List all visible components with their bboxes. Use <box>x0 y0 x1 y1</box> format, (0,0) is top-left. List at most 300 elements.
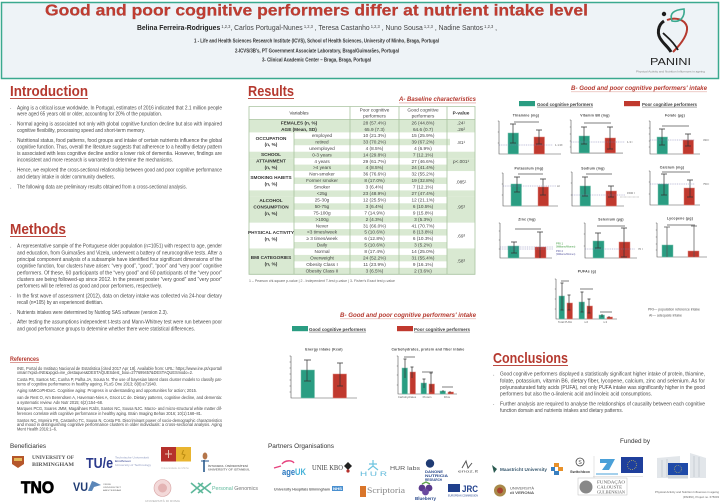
chart note: PRI and AI: PRI— population reference intake <box>648 308 700 312</box>
row labels: (n, %) <box>265 236 278 242</box>
chart: carbohydrates, protein and fiber: Fibre <box>444 395 451 399</box>
good performers column: 7 (12.1%) <box>413 152 434 157</box>
logo: JRC <box>448 484 478 498</box>
authors: , <box>493 23 497 32</box>
logo: JRC: EUROPEAN COMMISSION <box>448 494 478 498</box>
text block: reference list: INE. Portal do Instituto Nacional de Estatística [cited 2017 Apr 18]. Available from: URL: https://www.ine.pt/xportal/ <box>17 366 223 371</box>
logo: VU: AMSTERDAM <box>103 489 121 492</box>
authors: , Teresa Castanho <box>313 23 370 32</box>
row labels: (n, %) <box>265 262 278 266</box>
text block: methods bullets: A representative sample of the Portuguese older population (n=1051) with respect to age, gender <box>17 244 222 250</box>
poor performers column: 4 (8.5%) <box>366 165 384 170</box>
logo: Istanbul University: İSTANBUL ÜNİVERSİTESİ <box>208 463 248 468</box>
p-value column: .085¹ <box>456 180 467 184</box>
text block: methods bullets: performers. Of these, 60 participants of the “very good” and 60 participants of the “very poor” <box>17 270 222 276</box>
poor performers column: 3 (6.4%) <box>366 204 384 209</box>
table grid <box>249 106 475 274</box>
logo: FP7 <box>593 456 643 478</box>
chart: sodium <box>571 166 639 206</box>
text block: introduction bullets: Nutritional status, food patterns, food groups and intake of certain nutrients influence the global <box>17 138 222 144</box>
authors: 1,2,3 <box>423 24 433 29</box>
good performers column: 32 (55.2%) <box>412 172 435 177</box>
logo: Fundação Calouste Gulbenkian: FUNDAÇÃO <box>597 480 626 484</box>
logo: TU/e: Technische Universiteit <box>115 456 149 460</box>
chart: zinc: (Williams/Women) <box>556 253 576 256</box>
text block: reference list: ferences correlate with cognitive performance in healthy aging. Brain Imaging Behav 2016; 10(1):168–81. <box>17 411 202 416</box>
text block: conclusions bullets <box>493 372 705 414</box>
poor performers column: 2 (4.3%) <box>366 217 384 222</box>
text block: reference list: van de Rest O, Am Berendsen A, Haveman-Nies A, Groot LC de. Dietary patterns, cognitive decline, and dementia: <box>17 395 222 400</box>
good performers column: 6 (10.3%) <box>413 236 434 241</box>
chart: zinc: PRI 1 <box>556 242 563 246</box>
text block: methods bullets: recall (n=105) by an experienced dietitian. <box>17 300 103 306</box>
logo: University of Verona <box>494 484 534 496</box>
logo: HUR: HUR labs <box>390 466 421 472</box>
authors: , Nuno Sousa <box>380 23 424 32</box>
PANINI logo: Physical Activity and Nutrition Influences in ageing <box>636 70 705 74</box>
text block: reference list: terns of cognitive performance in healthy ageing. PLoS One 2013; 8(8):e71940. <box>17 382 157 386</box>
label: beneficiaries: Beneficiaries <box>10 443 47 450</box>
affiliations: 2-ICVS/3B's, PT Government Associate Laboratory, Braga/Guimarães, Portugal <box>235 48 400 54</box>
chart: thiamine <box>498 114 563 154</box>
panel: conclusions <box>493 350 705 414</box>
category column: Overweight <box>310 256 335 260</box>
good performers column: 24 (41.4%) <box>412 165 435 170</box>
table header: performers <box>412 114 435 118</box>
p-value column: .81¹ <box>457 140 465 145</box>
logo: Fundação Calouste Gulbenkian: CALOUSTE <box>597 484 622 490</box>
poor performers column: 5 (10.6%) <box>364 230 385 235</box>
panel: intake charts lower <box>290 313 477 399</box>
logo: VU: UNIVERSITEIT <box>103 487 122 489</box>
good performers column: 6 (10.5%) <box>413 204 434 209</box>
logo: Blueberry <box>415 482 436 501</box>
logo: University of Minho: Universidade do Minho <box>161 466 189 470</box>
chart: zinc: PRI 2 <box>556 249 563 253</box>
row labels: ALCOHOL <box>259 198 283 203</box>
logo: University Hospitals Birmingham: University Hospitals Birmingham <box>274 488 330 492</box>
logo: TU/e <box>86 455 152 472</box>
poor performers column: 5 (10.6%) <box>364 243 385 248</box>
legend: lower: Poor cognitive performers <box>414 327 470 333</box>
panel: funders <box>570 438 719 499</box>
logo: VU: VU <box>73 480 88 494</box>
logo: TU/e: University of Technology <box>115 463 152 467</box>
chart: lycopene <box>656 216 707 257</box>
good performers column: 27 (46.6%) <box>412 159 435 164</box>
text block: conclusions bullets: function domain and nutrients intakes and dietary patterns. <box>500 408 623 414</box>
row labels: CONSUMPTION <box>253 204 289 210</box>
text block: methods bullets: clusters are being followed-up since 2012. In the present poster “very good” and “very poor” <box>17 277 222 283</box>
chart: potassium: AI <box>557 184 560 188</box>
poor performers column: 65.9 (7.3) <box>364 127 385 132</box>
chart: carbohydrates, protein and fiber: Carbohydrates <box>398 395 417 399</box>
logo: University of Birmingham <box>12 455 75 468</box>
table footnote: 1 – Pearson chi-square p-value | 2 - Independent T-test p-value | 3- Fisher's Exact test p-value <box>249 279 395 283</box>
poor performers column: 3 (6.4%) <box>366 185 384 190</box>
category column: 25-30g <box>315 198 330 202</box>
chart: thiamine: 1.1 RI <box>555 143 563 147</box>
p-value column: .26² <box>457 127 465 132</box>
text block: reference list: and mood in distinguishing cognitive performance clusters in older individuals: a cross-sectional analysis. Aging <box>17 422 223 427</box>
chart: zinc <box>499 218 576 258</box>
good performers column: 26 (44.8%) <box>412 120 435 125</box>
logo: Danone Nutricia Research: DANONE <box>425 469 443 474</box>
text block: methods bullets: . <box>10 244 12 250</box>
logo: Switchbox: S <box>578 460 582 466</box>
chart: pufas: Total PUFA <box>558 320 572 324</box>
row labels <box>248 120 318 267</box>
logo: Sapienza seal <box>145 480 180 503</box>
text block: methods bullets: Nutrients intakes were determined by Nutrilog SAS software (version 2.3). <box>17 310 168 316</box>
logo: University of Verona: UNIVERSITÀ <box>510 486 534 490</box>
PANINI logo: PANINI <box>650 57 691 68</box>
text block: introduction bullets: . <box>10 138 12 144</box>
affiliations: 1 - Life and Health Sciences Research Institute (ICVS), School of Health Sciences, University of Minho, Braga, Portugal <box>194 38 440 44</box>
poor performers column: 36 (76.6%) <box>363 172 386 177</box>
good performers column: 15 (25.9%) <box>412 133 435 138</box>
logo: Danone Nutricia Research <box>425 459 448 482</box>
p-value column: .24¹ <box>457 120 465 125</box>
row labels: BMI CATEGORIES <box>251 255 291 260</box>
good performers column: 12 (21.1%) <box>412 198 435 202</box>
poor performers column: 11 (23.9%) <box>363 262 386 267</box>
heading: results: Results <box>248 83 294 100</box>
table header: Good cognitive <box>407 108 439 112</box>
good performers column: 2 (3.6%) <box>414 268 432 273</box>
poor performers column: 4 (8.5%) <box>366 146 384 151</box>
category column <box>306 133 338 273</box>
chart: sodium: Sodium (mg) <box>581 166 605 170</box>
row labels: PHYSICAL ACTIVITY <box>248 230 295 235</box>
p-value column: .58³ <box>457 258 465 264</box>
affiliations: 3- Clinical Academic Center – Braga, Braga, Portugal <box>262 58 372 64</box>
label: partners organisations: Partners Organisations <box>268 443 335 450</box>
poor performers column: 10 (21.3%) <box>363 133 386 138</box>
legend: lower <box>292 326 470 333</box>
authors: , Nadine Santos <box>433 23 483 32</box>
category column: Never <box>316 223 329 228</box>
p-value column: p<.001¹ <box>453 159 469 164</box>
logo: Istanbul University <box>201 452 250 472</box>
text block: conclusions bullets: performers but also the α-linolenic acid and linoleic acid consumptions. <box>500 392 652 398</box>
logo: Maastricht University <box>492 465 548 473</box>
logo: Sapienza seal: UNIVERSITÀ DI ROMA <box>145 499 180 503</box>
text block: introduction bullets: . <box>10 168 12 174</box>
good performers column: 27 (47.4%) <box>412 191 435 196</box>
p-value column <box>453 120 469 264</box>
heading: methods: Methods <box>10 221 66 238</box>
category column: employed <box>312 133 333 138</box>
good performers column <box>412 120 435 273</box>
logo: Switchbox: Switchbox <box>570 469 591 474</box>
logo: Switchbox <box>570 458 591 474</box>
subheading: intake lower: B- Good and poor cognitive performers' intake <box>340 313 477 319</box>
text block: reference list: Santos NC, Moreira PS, Castanho TC, Sousa N, Costa PS. Discriminant power of socio-demographic characteristics <box>17 418 222 423</box>
chart: folate: 330 I <box>703 138 709 142</box>
row labels: (n, %) <box>265 142 278 147</box>
logo: University of Birmingham: BIRMINGHAM <box>32 462 75 468</box>
category column: Non-smoker <box>309 172 335 177</box>
logo: European Commission <box>655 453 719 499</box>
text block: reference list: xmain?xpid=INE&xpgid=ine_destaques&DESTAQUESdest_boui=277699457&DESTAQUESmodo=2. <box>17 370 193 375</box>
text block: reference list: Aging IoMICoPHDoC. Cognitive aging: Progress in understanding and opportunities for action; 2015. <box>17 388 197 393</box>
row labels: (n, %) <box>265 211 278 216</box>
table header: P-value <box>453 110 470 116</box>
good performers column: 41 (70.7%) <box>412 223 435 228</box>
logo: EU flag small <box>621 457 643 473</box>
chart: pufas: PUFAs (g) <box>578 270 596 274</box>
good performers column: 3 (5.2%) <box>414 243 432 248</box>
heading: references: References <box>10 356 39 363</box>
chart: lycopene: Lycopene (µg) <box>667 216 693 220</box>
category column: 0-3 years <box>312 152 332 157</box>
logo: University Hospitals Birmingham: NHS <box>333 486 342 491</box>
category column: >100g <box>315 217 329 222</box>
logo: Fundação Calouste Gulbenkian: GULBENKIAN <box>597 490 626 494</box>
chart note: PRI and AI: AI— adequate intake <box>649 314 682 318</box>
chart: folate <box>649 114 709 154</box>
panel: intake charts upper <box>498 86 709 324</box>
text block: introduction bullets: Hence, we explored the cross-sectional relationship between good and poor cognitive performance <box>17 168 222 174</box>
category column: Obesity Class I <box>306 262 338 267</box>
good performers column: 39 (67.2%) <box>412 139 435 144</box>
text block: reference list <box>17 366 223 432</box>
logo: VU <box>73 480 122 494</box>
logo: VU: VRIJE <box>103 484 112 486</box>
category column: unemployed <box>309 146 335 151</box>
logo: Personal Genomics <box>191 483 258 493</box>
logo: Unie KBO <box>312 462 352 473</box>
logo: University Hospitals Birmingham <box>274 486 343 492</box>
authors: , Carlos Portugal-Nunes <box>230 23 303 32</box>
poor performers column: 28 (57.4%) <box>363 120 386 125</box>
logo: European Commission: Physical Activity and Nutrition Influences in ageing <box>655 490 719 494</box>
p-value column: .69³ <box>457 234 465 238</box>
text block: introduction bullets: Aging is a critical issue worldwide. In Portugal, estimates of 2016 indicated that 2.1 million people <box>17 105 222 111</box>
PANINI logo <box>636 9 705 74</box>
category column: Daily <box>317 243 328 248</box>
text block: introduction bullets: Normal ageing is associated not only with global cognitive function decline but also with impaired <box>17 121 222 127</box>
category column: Former smoker <box>306 178 338 183</box>
logo: partner cross <box>551 463 563 475</box>
chart: vitamin b6: Vitamin B6 (mg) <box>580 114 610 118</box>
poor performers column: 8 (17.4%) <box>364 249 385 254</box>
text block: methods bullets: After testing the assumptions independent t-tests and Mann-Whitney test were run between poor <box>17 320 222 326</box>
text block: methods bullets: and good performance groups to determine whether there were statistical differences. <box>17 326 195 332</box>
panel: results table <box>248 83 477 283</box>
good performers column: 7 (12.1%) <box>413 185 434 190</box>
good performers column: 31 (55.4%) <box>412 256 435 260</box>
subheading: intake upper: B- Good and poor cognitive performers' intake <box>571 86 708 92</box>
text block: conclusions bullets: . <box>493 372 495 378</box>
chart: zinc: (Williams/Women) <box>556 246 576 248</box>
logo: Unie KBO: UNIE KBO <box>312 464 343 472</box>
text block: methods bullets: . <box>10 293 12 299</box>
legend: upper: Poor cognitive performers <box>642 102 697 108</box>
panel: introduction <box>10 83 222 191</box>
poor performers column: 31 (66.0%) <box>363 223 386 228</box>
authors: Belina Ferreira-Rodrigues <box>137 23 220 32</box>
good performers column: 9 (15.8%) <box>413 210 434 215</box>
row labels: SCHOOL <box>261 152 281 157</box>
category column: retired <box>315 139 329 144</box>
chart: pufas: n-6 <box>584 320 588 324</box>
category column: <25g <box>317 191 328 196</box>
logo: Danone Nutricia Research: NUTRICIA <box>425 473 448 478</box>
chart: selenium <box>584 218 643 258</box>
row labels: (n, %) <box>265 182 278 186</box>
authors: 1,2,3 <box>220 24 231 29</box>
good performers column: 8 (13.8%) <box>413 230 434 235</box>
chart: calcium <box>649 166 709 205</box>
text block: introduction bullets: . <box>10 105 12 111</box>
logo: age UK: ageUK <box>282 467 306 477</box>
chart: vitamin b6: 1.3 I <box>627 140 633 144</box>
text block: reference list: a systematic review. Adv Nutr 2015; 6(2):154–68. <box>17 400 103 405</box>
heading: introduction: Introduction <box>10 83 88 100</box>
logo: Scriptoria <box>360 486 406 497</box>
text block: introduction bullets: . <box>10 121 12 127</box>
category column: 50-75g <box>315 204 330 209</box>
logo: partner mark <box>458 461 479 474</box>
table header: performers <box>363 114 386 118</box>
chart: pufas: n-3 <box>603 320 607 324</box>
logo: Fundação Calouste Gulbenkian <box>578 478 627 495</box>
row labels: (n, %) <box>265 165 278 170</box>
logo: TU/e: TU/e <box>86 455 113 472</box>
good performers column: 14 (25.0%) <box>412 249 435 254</box>
category column: ≥ 3 times/week <box>306 236 338 241</box>
good performers column: 19 (32.8%) <box>412 178 435 183</box>
logo: University of Verona: di VERONA <box>510 490 534 495</box>
good performers column: 64.6 (0.7) <box>413 127 433 132</box>
p-value column: .95³ <box>457 204 465 210</box>
text block: introduction bullets: cognitive flexibility, processing speed and short-term memory. <box>17 128 145 134</box>
chart: folate: Folate (µg) <box>665 114 685 118</box>
chart: pufas <box>555 270 617 324</box>
text block: methods bullets: principal component analysis of a subsample have identified four significant dimensions of the <box>17 257 222 263</box>
text block: introduction bullets: were aged 65 years old or older, accounting for 20% of the population. <box>16 111 162 117</box>
logo: HUR: H U R <box>360 471 387 478</box>
poor performers column: 29 (61.7%) <box>363 159 386 164</box>
category column: >4 years <box>313 165 332 170</box>
poor performers column: 8 (17.0%) <box>364 178 385 183</box>
text block: introduction bullets: and dietary intake in older community dwellers. <box>17 175 115 181</box>
logo: Maastricht University: Maastricht University <box>500 467 548 472</box>
poor performers column: 3 (6.5%) <box>366 268 384 273</box>
logo: Istanbul University: UNIVERSITY OF ISTANBUL <box>208 468 250 472</box>
label: funded by: Funded by <box>620 438 651 445</box>
text block: introduction bullets: cognitive function. Thus, overall the literature suggests that adherence to a healthy dietary pattern <box>17 145 222 151</box>
poor performers column <box>363 120 386 273</box>
heading: conclusions: Conclusions <box>493 350 568 367</box>
logo: TNO: TNO <box>21 478 54 497</box>
logo: Blueberry: Blueberry <box>415 496 436 501</box>
text block: introduction bullets: is associated with less cognitive decline and/or a lower risk of dementia. However, findings are <box>17 151 222 157</box>
legend: lower: Good cognitive performers <box>309 327 366 333</box>
category column: Obesity Class II <box>306 268 338 273</box>
text block: introduction bullets: The following data are preliminary results obtained from a cross-sectional analysis. <box>17 185 187 191</box>
category column: Smoker <box>314 185 331 190</box>
text block: methods bullets <box>10 244 223 332</box>
category column: 75-100g <box>313 210 331 215</box>
chart: selenium: Selenium (µg) <box>598 218 624 222</box>
logo: partner mark: enoz.it <box>458 468 479 474</box>
poor performers column: 12 (25.5%) <box>363 198 386 202</box>
chart: thiamine: Thiamine (mg) <box>513 114 539 118</box>
panel: partner organisations logos <box>268 443 563 501</box>
poor performers column: 24 (52.2%) <box>363 256 386 260</box>
logo: Personal Genomics: Personal Genomics <box>212 486 258 492</box>
authors: 1,2,3 <box>303 24 313 29</box>
chart: calcium: 750 I <box>703 182 709 186</box>
legend: upper: Good cognitive performers <box>537 102 593 108</box>
text block: conclusions bullets: . <box>493 401 495 407</box>
chart: energy intake <box>290 348 357 398</box>
chart: selenium: 70 I <box>638 247 643 251</box>
chart: carbohydrates, protein and fiber: Carbohydrates, protein and fiber intake <box>391 348 465 352</box>
chart: vitamin b6 <box>570 114 633 153</box>
text block: introduction bullets <box>10 105 222 191</box>
logo: University of Birmingham: UNIVERSITY OF <box>32 455 75 461</box>
chart note: PRI and AI <box>648 308 700 318</box>
header banner <box>2 2 718 78</box>
text block: conclusions bullets: folate, potassium, vitamin B6, dietary fiber, lycopene, calcium, zinc and selenium. As for <box>500 378 705 384</box>
text block: methods bullets: . <box>10 310 12 316</box>
baseline table <box>248 106 475 274</box>
category column: 4 years <box>314 159 330 164</box>
good performers column: 3 (5.3%) <box>414 217 432 222</box>
chart: carbohydrates, protein and fiber: Protein <box>423 395 432 399</box>
text block: methods bullets: . <box>10 320 12 326</box>
row labels: SMOKING HABITS <box>250 175 292 180</box>
poor performers column: 7 (14.9%) <box>364 210 385 215</box>
chart: potassium: Potassium (mg) <box>515 166 543 170</box>
text block: introduction bullets: . <box>10 184 12 190</box>
chart: sodium: 1500 I <box>627 191 635 195</box>
good performers column: 9 (16.1%) <box>413 262 434 267</box>
row labels: AGE (Mean, SD) <box>281 127 317 132</box>
good performers column: 4 (6.9%) <box>414 146 432 151</box>
poor performers column: 23 (48.9%) <box>363 191 386 196</box>
panel: references <box>10 356 223 432</box>
subheading: baseline characteristics: A- Baseline characteristics <box>398 97 477 103</box>
category column: <3 times/week <box>307 230 338 235</box>
text block: methods bullets: and education, from Guimarães and Vizela, underwent a battery of neurocognitive tests. After a <box>17 250 223 256</box>
poor performers column: 14 (29.8%) <box>363 152 386 157</box>
chart: calcium: Calcium (mg) <box>660 166 684 170</box>
table header: Poor cognitive <box>360 108 390 112</box>
authors: 1,2,3 <box>370 24 380 29</box>
table header: Variables <box>289 110 309 116</box>
authors: 1,2,3 <box>483 24 494 29</box>
logo: JRC: JRC <box>462 484 478 494</box>
row labels: FEMALES (n, %) <box>281 120 318 125</box>
logo: TU/e: Eindhoven <box>115 459 132 463</box>
logo: HUR <box>360 460 421 478</box>
row labels: ATTAINMENT <box>256 158 286 164</box>
table shading <box>249 120 475 274</box>
text block: reference list: Ment Health 2016:1–6. <box>17 426 57 432</box>
legend: upper <box>519 101 697 108</box>
row labels: OCCUPATION <box>256 136 287 141</box>
chart: carbohydrates, protein and fiber <box>391 348 465 399</box>
table header <box>289 108 470 118</box>
logo: age UK <box>274 461 306 477</box>
chart: potassium <box>502 166 560 206</box>
title: Good and poor cognitive performers differ at nutrient intake level <box>45 2 588 20</box>
